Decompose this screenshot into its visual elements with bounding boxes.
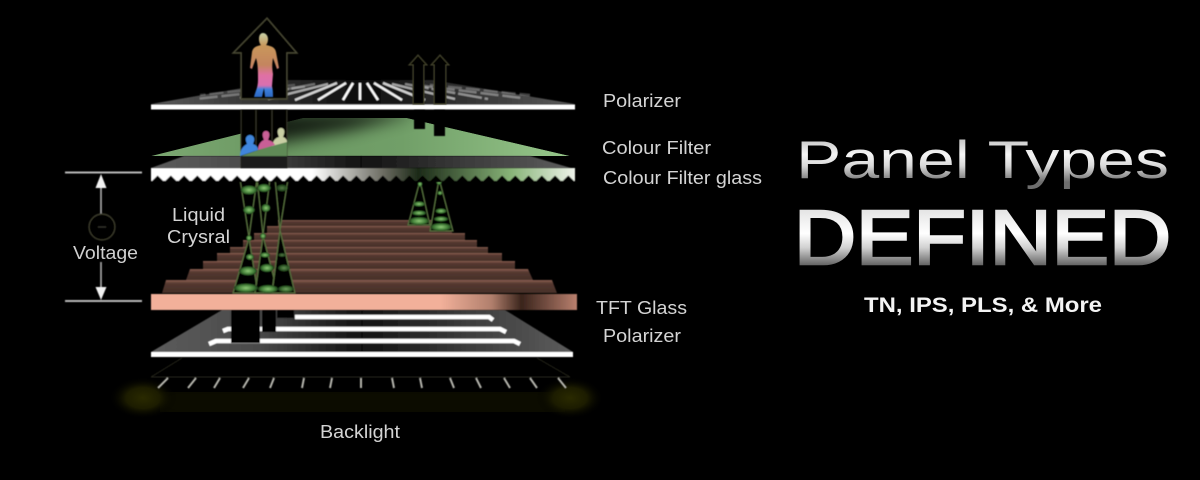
backlight frame and light ticks [151,358,570,388]
icon: pink figure [258,131,275,150]
backlight glow [109,377,604,419]
liquid crystal twisted cones: right group [408,178,453,231]
liquid crystal twisted cones: left group [233,180,295,293]
icon: blue figure [240,135,258,156]
arrow outline [233,18,297,99]
small arrows (right) [409,55,449,136]
subtitle: TN, IPS, PLS, & More [864,294,1102,317]
label: voltage: Voltage [73,243,138,263]
label: liquid crystal [167,205,230,247]
colour filter glass: zigzag edge [151,168,575,182]
colour filter glass: dark band [151,156,571,168]
icon: person [250,33,279,97]
label: colour filter: Colour Filter [602,137,711,158]
big light arrow with person [233,18,297,99]
title: DEFINED: DEFINED [794,195,1171,281]
diagram: LCD panel layers [65,18,762,442]
icon: voltage source [89,214,115,240]
label: colour filter glass: Colour Filter glass [603,167,762,188]
icon: cream figure [272,128,287,146]
voltage indicator [65,172,142,301]
label: polarizer bottom: Polarizer [603,325,681,346]
title: Panel Types: Panel Types [796,131,1169,190]
colour filter arrow shaft with small figures [240,110,287,168]
colour filter: green plate [152,118,570,156]
TFT glass [151,294,577,310]
label: polarizer top: Polarizer [603,90,681,111]
label: backlight: Backlight [320,422,400,442]
label: liquid crystal: Liquid [172,205,225,225]
title block [794,131,1171,317]
label: liquid crystal: Crysral [167,227,230,247]
label: TFT glass: TFT Glass [596,297,687,318]
bottom polarizer [151,310,573,357]
liquid crystal brown ridges [162,220,557,293]
top polarizer [151,80,575,110]
